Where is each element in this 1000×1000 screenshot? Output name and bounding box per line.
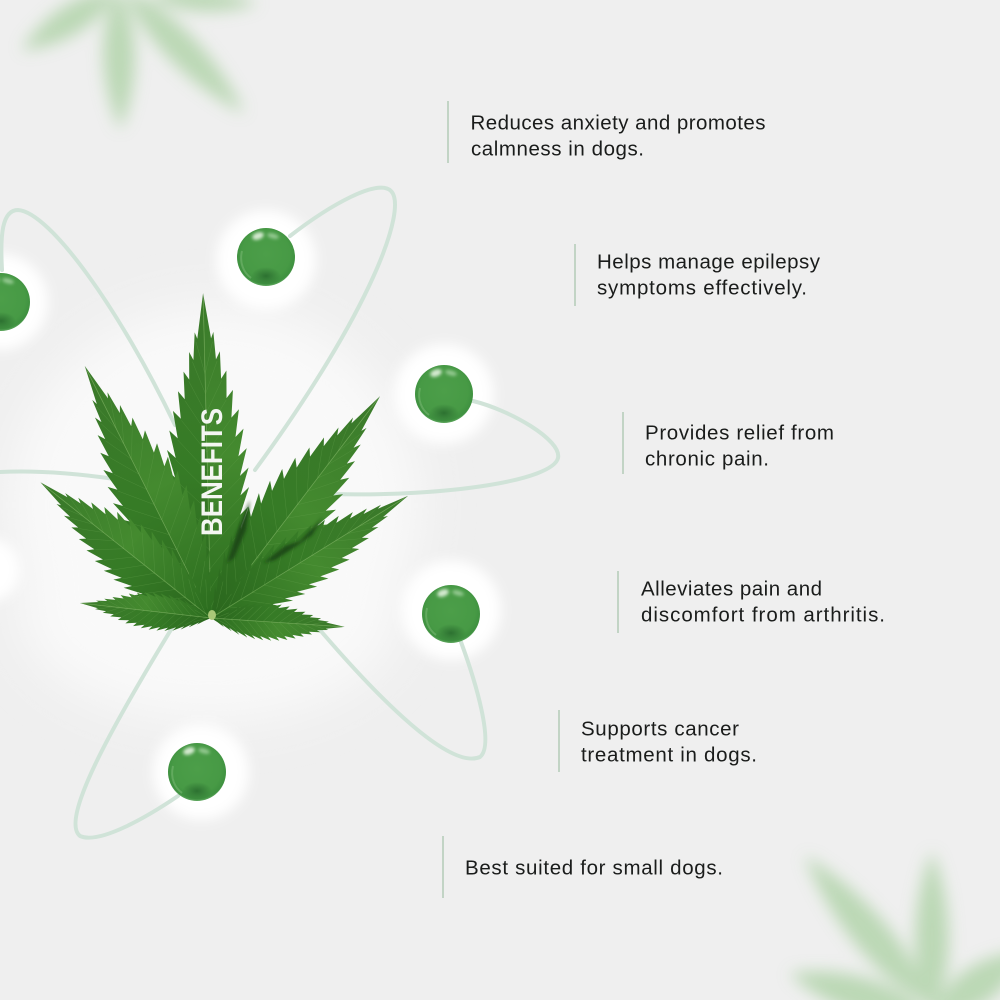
benefit: chronic pain [623,412,834,474]
sphere glows [0,210,501,820]
benefit: cancer: Supports cancer [581,718,739,740]
central white glow [10,305,420,720]
blurred leaf bottom-right [784,844,1000,1000]
benefit: epilepsy [575,244,821,306]
benefit: chronic pain: Provides relief from [645,422,834,444]
benefit: epilepsy: Helps manage epilepsy [597,250,821,274]
benefit: anxiety: Reduces anxiety and promotes [470,112,766,134]
benefit: arthritis: discomfort from arthritis. [641,604,885,626]
sphere 3 [415,365,473,423]
sphere 1 [237,228,295,286]
sphere 5 [168,743,226,801]
benefit: arthritis [618,571,885,633]
orbit rings [0,188,558,838]
benefit: anxiety: calmness in dogs. [471,138,644,160]
leaf label: BENEFITS: BENEFITS [196,408,229,536]
benefit: arthritis: Alleviates pain and [641,578,822,600]
sphere 4 [422,585,480,643]
benefit: chronic pain: chronic pain. [645,448,769,470]
benefit: cancer [559,710,757,772]
blurred leaf top-left [14,0,259,130]
cannabis leaf [21,292,424,646]
benefit: small dogs: Best suited for small dogs. [465,856,723,880]
benefit: anxiety [448,101,766,163]
sphere 2 [0,273,30,331]
benefit: epilepsy: symptoms effectively. [597,276,807,300]
benefit: cancer: treatment in dogs. [581,744,757,766]
